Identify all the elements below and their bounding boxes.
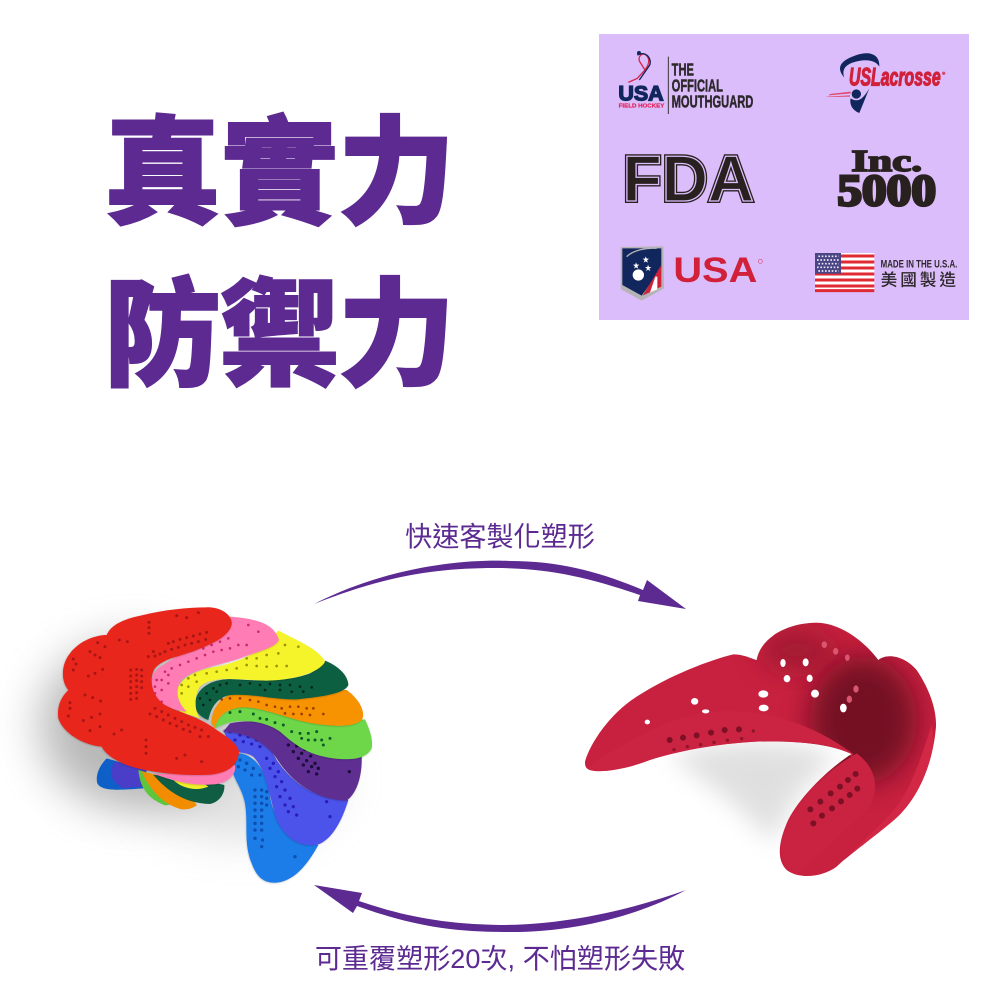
lower lip holes — [674, 731, 753, 750]
heading line 2: 防禦力 — [104, 270, 455, 401]
guard body — [585, 622, 936, 876]
logo: FDA: FDA — [623, 142, 754, 215]
soft shadow — [670, 743, 837, 843]
logo: made in the USA flag: 美國製造 — [881, 271, 956, 290]
logo: USA Field Hockey official mouthguard: OFFICIAL — [672, 75, 723, 95]
logo: US Lacrosse: USLacrosse — [849, 65, 941, 92]
white through holes — [645, 658, 847, 724]
front lip — [587, 721, 854, 772]
logo: USA Lacrosse shield — [621, 246, 762, 301]
guard: azure — [232, 753, 318, 883]
guard: purple — [223, 721, 362, 801]
logo: USA Field Hockey official mouthguard: THE — [672, 59, 694, 79]
guard: orange — [212, 690, 363, 728]
logo: USA Field Hockey official mouthguard: MOUTHGUARD — [672, 91, 753, 111]
logo: Inc. 5000 — [837, 144, 936, 215]
guard: dark green — [195, 661, 348, 720]
heading line 1: 真實力 — [104, 108, 455, 239]
image: rainbow mouthguards fan — [17, 607, 372, 884]
logo: USA Field Hockey official mouthguard: USA — [618, 81, 664, 105]
logo: FDA: FDA — [623, 142, 754, 215]
logo: USA Field Hockey official mouthguard — [618, 51, 753, 114]
arrow: forward curved — [314, 560, 686, 609]
panel: certification logos — [599, 34, 969, 320]
dark side holes — [670, 729, 857, 823]
logo: made in the USA flag — [815, 253, 957, 292]
guard: indigo — [223, 729, 348, 845]
logo: made in the USA flag: MADE IN THE U.S.A. — [881, 258, 957, 270]
logo: Inc. 5000: Inc. — [851, 144, 922, 178]
logo: Inc. 5000: 5000 — [837, 165, 936, 215]
right wall — [845, 726, 933, 860]
arrow: backward curved — [314, 885, 686, 932]
guard: pink — [151, 617, 279, 785]
guard: yellow — [175, 631, 325, 718]
guard: red — [58, 607, 239, 775]
caption: fast custom moulding: 快速客製化塑形 — [405, 521, 595, 552]
logo: USA Lacrosse shield: USA — [673, 251, 757, 290]
caption: reshape 20 times: 可重覆塑形20次, 不怕塑形失敗 — [315, 943, 685, 974]
tray — [794, 754, 875, 875]
image: moulded red mouthguard — [585, 622, 936, 876]
pink blind holes — [822, 641, 859, 703]
title — [104, 108, 455, 401]
back pieces under the red guard — [97, 758, 224, 809]
logo: USA Field Hockey official mouthguard: FIELD HOCKEY — [619, 103, 665, 109]
logo: US Lacrosse — [827, 53, 945, 113]
guard: light green — [215, 703, 372, 759]
